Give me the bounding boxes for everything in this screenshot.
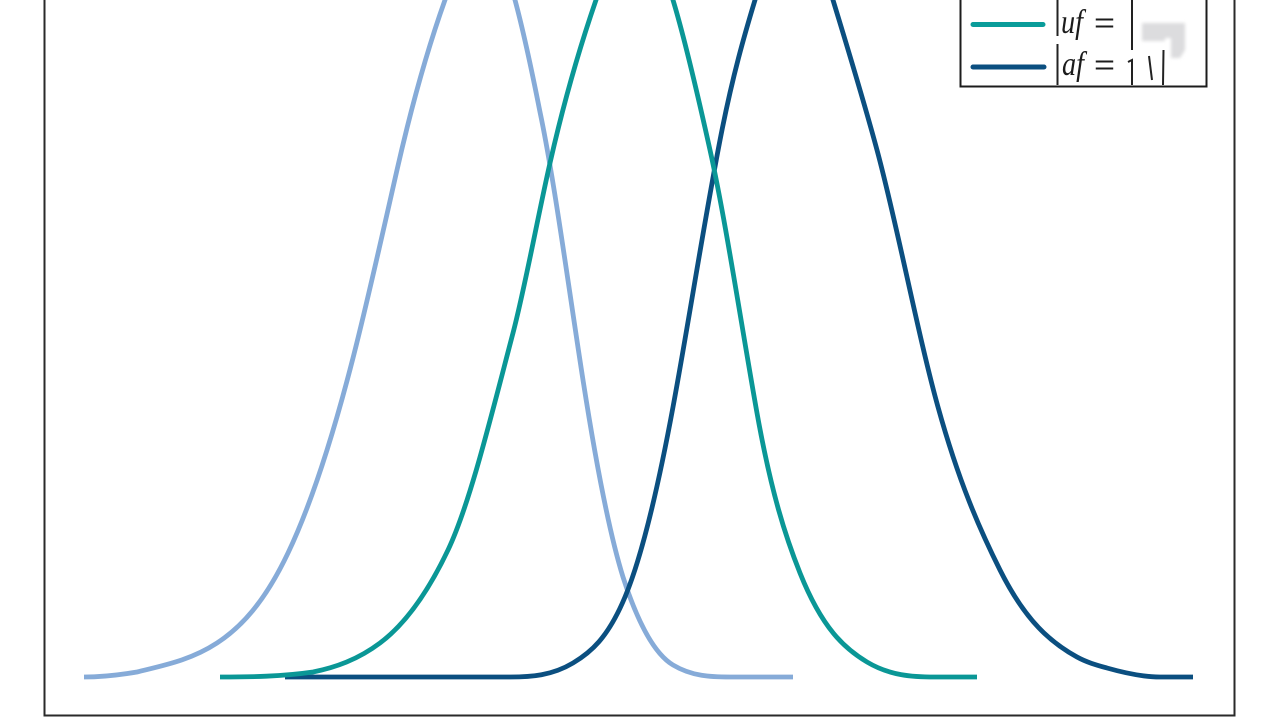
legend label: navy: af [1062,46,1088,83]
legend swatch: teal [973,22,1043,27]
curve: light blue series [84,0,793,677]
legend equals: teal: = [1094,7,1115,38]
curve: teal series [220,0,977,677]
legend label: value glyphs [1058,0,1164,85]
legend box [960,0,1206,86]
legend swatch: navy [973,64,1044,70]
curve: navy series [285,0,1193,677]
legend label: teal: uf [1061,4,1087,41]
legend [960,0,1206,86]
legend equals: navy: = [1094,49,1115,80]
legend smudge [1142,23,1185,58]
